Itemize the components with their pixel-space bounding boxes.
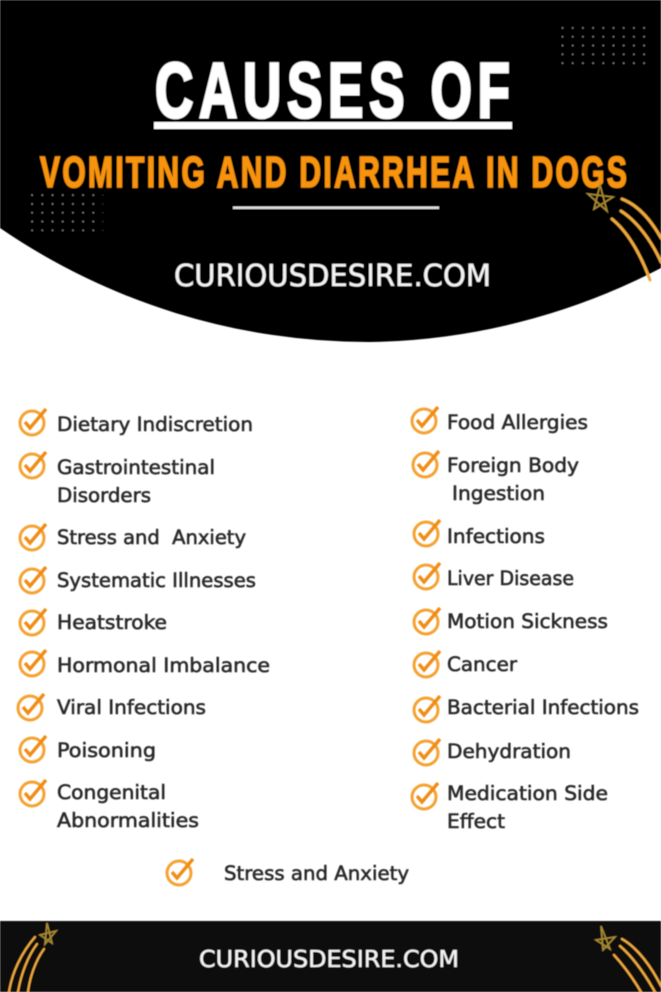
right column checklist (412, 407, 639, 833)
dot pattern left (23, 192, 103, 237)
item: Food Allergies (412, 407, 588, 434)
item: Gastrointestinal Disorders: Disorders (57, 484, 151, 507)
bottom item: Stress and Anxiety (167, 859, 409, 885)
item: Viral Infections: Viral Infections (57, 696, 206, 719)
bottom item: Stress and Anxiety: Stress and Anxiety (224, 862, 409, 885)
item: Dietary Indiscretion: Dietary Indiscretion (57, 413, 253, 436)
item: Infections (414, 520, 545, 548)
subtitle: VOMITING AND DIARRHEA IN DOGS (40, 147, 627, 196)
item: Liver Disease (414, 563, 574, 590)
item: Dehydration (414, 739, 571, 765)
item: Cancer: Cancer (447, 653, 518, 676)
item: Heatstroke (20, 609, 167, 635)
item: Infections: Infections (447, 525, 545, 548)
item: Stress and Anxiety: Stress and Anxiety (57, 526, 246, 549)
item: Congenital Abnormalities (20, 780, 199, 832)
item: Medication Side Effect: Effect (447, 810, 505, 833)
item: Liver Disease: Liver Disease (447, 567, 574, 590)
item: Foreign Body Ingestion: Foreign Body (447, 454, 579, 477)
footer band (0, 921, 661, 992)
item: Bacterial Infections: Bacterial Infections (447, 696, 639, 719)
item: Foreign Body Ingestion (413, 451, 579, 505)
item: Systematic Illnesses: Systematic Illnesses (57, 569, 256, 592)
item: Foreign Body Ingestion: Ingestion (452, 482, 545, 505)
icon: shooting star footer right (596, 926, 661, 992)
item: Heatstroke: Heatstroke (57, 611, 167, 634)
header black curved panel (0, 0, 661, 342)
item: Gastrointestinal Disorders (20, 452, 215, 507)
item: Viral Infections (18, 694, 206, 720)
icon: shooting star footer left (9, 923, 56, 992)
item: Hormonal Imbalance: Hormonal Imbalance (57, 654, 270, 677)
subtitle divider (233, 206, 439, 209)
footer website: CURIOUSDESIRE.COM (199, 947, 459, 973)
left column checklist (18, 409, 270, 832)
item: Food Allergies: Food Allergies (447, 411, 588, 434)
title: CAUSES OF (155, 48, 510, 135)
item: Gastrointestinal Disorders: Gastrointestinal (57, 456, 215, 479)
item: Congenital Abnormalities: Abnormalities (57, 809, 199, 832)
item: Medication Side Effect: Medication Side (447, 782, 608, 805)
item: Motion Sickness: Motion Sickness (447, 610, 608, 633)
item: Congenital Abnormalities: Congenital (57, 781, 166, 804)
icon: shooting star top right (588, 185, 661, 280)
item: Poisoning: Poisoning (57, 739, 156, 762)
item: Dehydration: Dehydration (447, 740, 571, 763)
item: Medication Side Effect (412, 782, 608, 833)
header website: CURIOUSDESIRE.COM (174, 259, 491, 294)
item: Hormonal Imbalance (20, 650, 270, 677)
item: Cancer (414, 651, 518, 677)
item: Poisoning (20, 736, 156, 762)
title underline (154, 122, 512, 129)
dot pattern top right (560, 22, 646, 70)
